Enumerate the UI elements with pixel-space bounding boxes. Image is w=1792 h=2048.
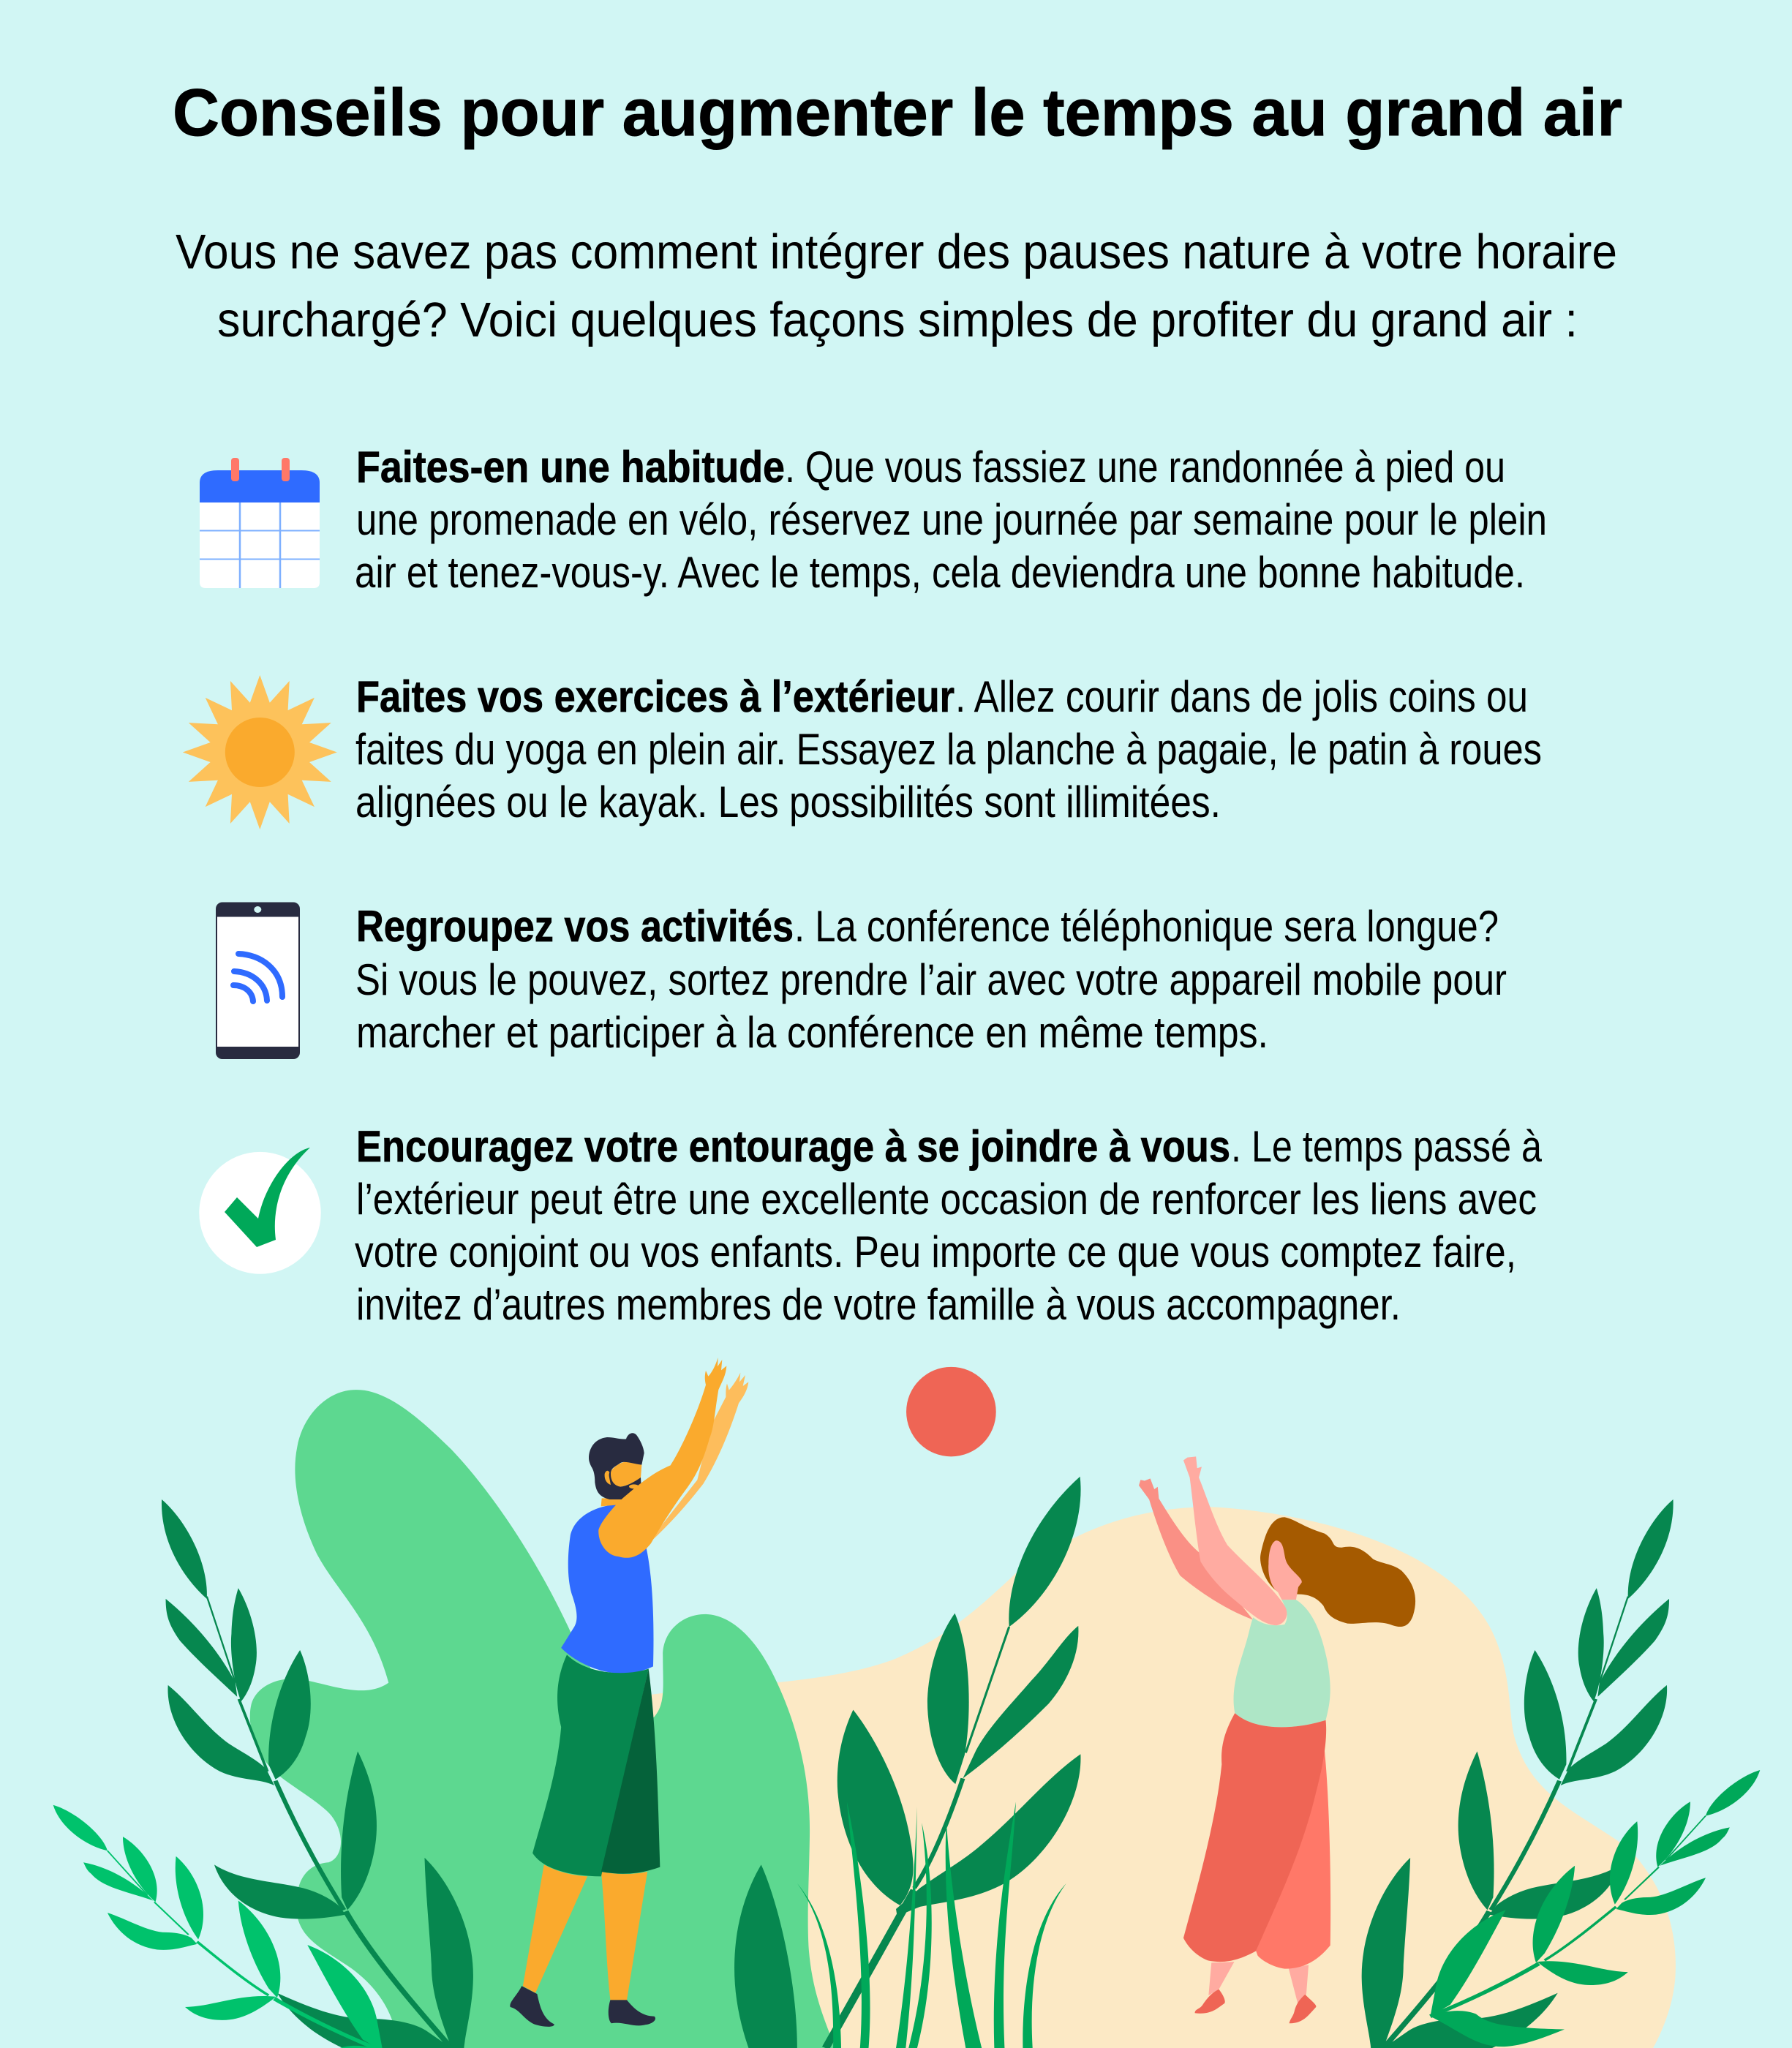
- man: shorts: [532, 1654, 649, 1876]
- man: face: [609, 1461, 641, 1487]
- text block: exercices: alignées ou le kayak. Les possibilités sont illimitées.: [355, 778, 1221, 827]
- man: front arm: [598, 1358, 726, 1558]
- outdoor illustration: [53, 1367, 1760, 2048]
- text block: entourage: Encouragez votre entourage à se joindre à vous: [356, 1122, 1230, 1171]
- text block: habitude: une promenade en vélo, réservez une journée par semaine pour le plein: [356, 495, 1547, 544]
- woman: front arm: [1183, 1456, 1287, 1625]
- man: neck: [601, 1498, 625, 1506]
- grass blades: [797, 1802, 1066, 2048]
- woman: shoes: [1195, 1989, 1316, 2023]
- title: Conseils pour augmenter le temps au grand air: [173, 76, 1622, 150]
- intro text: [176, 225, 1617, 347]
- right bright branch: [1430, 1770, 1760, 2047]
- icon: sun: [183, 675, 337, 829]
- woman: shirt: [1234, 1600, 1330, 1727]
- icon: check mark: [199, 1148, 321, 1274]
- text block: entourage: [355, 1122, 1543, 1329]
- woman: [1139, 1456, 1415, 2023]
- text block: habitude: [355, 443, 1547, 597]
- icon: phone: [216, 903, 300, 1059]
- intro text: Vous ne savez pas comment intégrer des pauses nature à votre horaire: [176, 225, 1617, 279]
- beige hill: [646, 1507, 1676, 2048]
- right dark branch: [1362, 1499, 1674, 2048]
- text block: habitude: Faites-en une habitude: [356, 443, 785, 492]
- man: back arm: [644, 1373, 748, 1548]
- woman: trouser right leg: [1256, 1750, 1330, 1969]
- ball: [906, 1367, 996, 1456]
- man: legs: [523, 1864, 647, 2000]
- green bush: [250, 1390, 835, 2048]
- woman: hair: [1260, 1517, 1415, 1627]
- text block: activités: . La conférence téléphonique sera longue?: [794, 902, 1499, 951]
- man: lower body: [510, 1504, 660, 2027]
- woman: face: [1268, 1540, 1302, 1600]
- man: head and arms: [589, 1358, 748, 1558]
- text block: entourage: l’extérieur peut être une excellente occasion de renforcer les liens avec: [356, 1175, 1537, 1224]
- man: mouth: [629, 1484, 639, 1488]
- text block: entourage: votre conjoint ou vos enfants. Peu importe ce que vous comptez faire,: [355, 1227, 1516, 1276]
- woman: trouser left leg: [1183, 1713, 1326, 1962]
- text block: habitude: . Que vous fassiez une randonnée à pied ou: [785, 443, 1505, 492]
- text block: exercices: [355, 672, 1542, 827]
- text block: activités: Regroupez vos activités: [356, 902, 794, 951]
- text block: exercices: Faites vos exercices à l’extérieur: [356, 672, 955, 721]
- intro text: surchargé? Voici quelques façons simples de profiter du grand air :: [217, 293, 1578, 347]
- left bright branch: [53, 1805, 383, 2048]
- man: shirt: [561, 1504, 653, 1674]
- woman: back arm: [1139, 1478, 1253, 1620]
- left dark branch: [162, 1499, 473, 2048]
- text block: habitude: air et tenez-vous-y. Avec le temps, cela deviendra une bonne habitude.: [355, 548, 1525, 597]
- centre plant: [826, 1477, 1081, 2048]
- bottom centre-left leaf: [734, 1864, 797, 2048]
- man: shorts shadow: [601, 1669, 660, 1874]
- text block: activités: Si vous le pouvez, sortez prendre l’air avec votre appareil mobile pour: [355, 955, 1507, 1004]
- man: hair and beard: [589, 1433, 644, 1499]
- man: ear: [605, 1471, 611, 1485]
- man: shoes: [510, 1986, 655, 2027]
- text block: activités: marcher et participer à la conférence en même temps.: [356, 1008, 1268, 1057]
- text block: activités: [355, 902, 1507, 1057]
- text block: exercices: . Allez courir dans de jolis coins ou: [955, 672, 1528, 721]
- text block: entourage: . Le temps passé à: [1231, 1122, 1543, 1171]
- icon: calendar: [200, 458, 320, 588]
- woman: legs: [1208, 1962, 1309, 2003]
- text block: entourage: invitez d’autres membres de votre famille à vous accompagner.: [356, 1280, 1401, 1329]
- text block: exercices: faites du yoga en plein air. Essayez la planche à pagaie, le patin à roues: [355, 725, 1542, 774]
